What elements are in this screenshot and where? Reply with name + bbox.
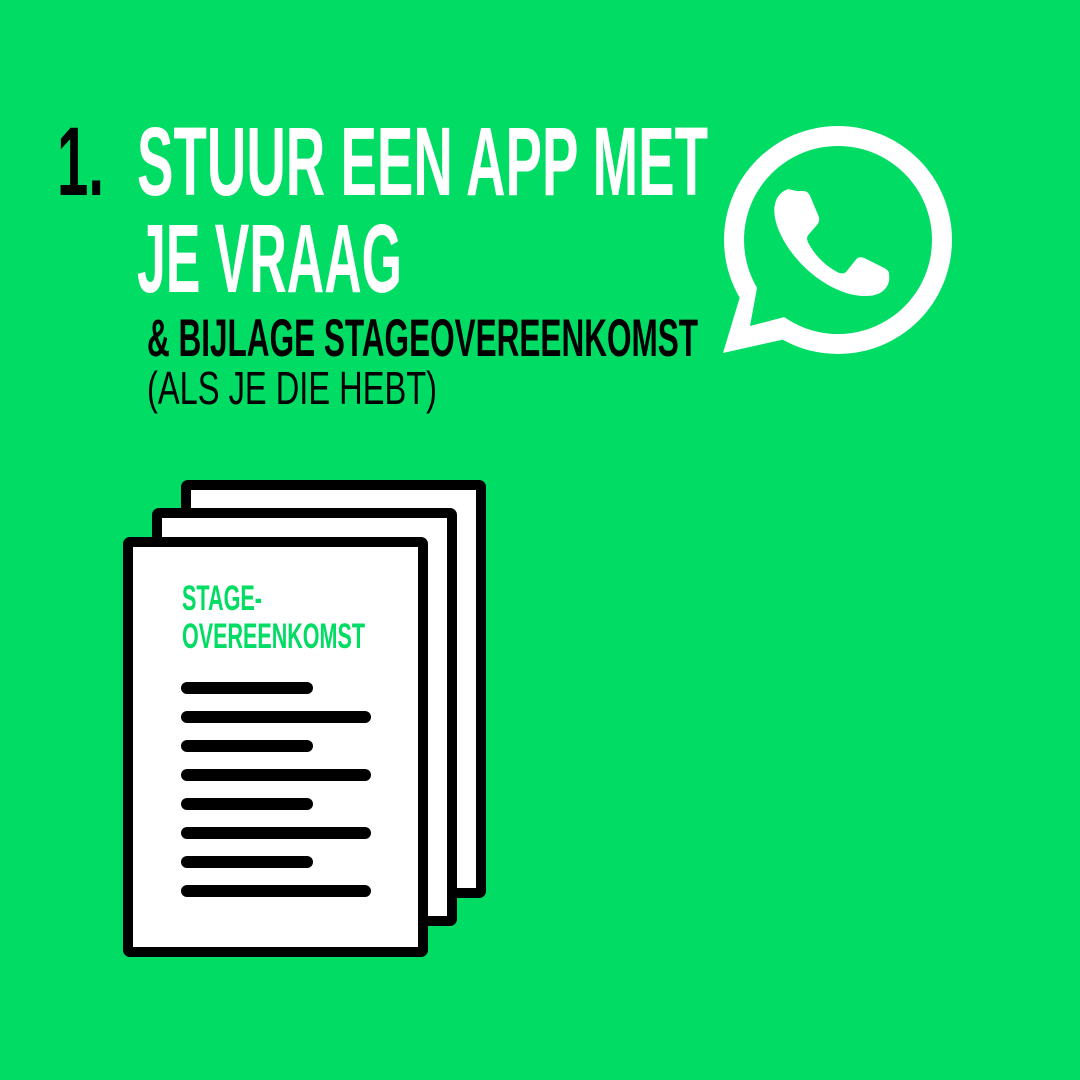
subtitle light: (ALS JE DIE HEBT) [147,362,437,414]
front page [128,542,423,952]
subtitle [147,309,698,414]
back page [186,485,481,893]
heading line 2: JE VRAAG [137,204,402,313]
middle page [157,513,452,921]
icon: whatsapp [723,126,952,354]
page title: OVEREENKOMST [182,617,365,656]
title [57,107,708,313]
step number: 1. [57,107,104,216]
documents stack [128,485,481,952]
page title [182,579,365,656]
text lines [187,688,365,891]
page title: STAGE- [182,579,262,618]
subtitle bold: & BIJLAGE STAGEOVEREENKOMST [147,309,698,368]
